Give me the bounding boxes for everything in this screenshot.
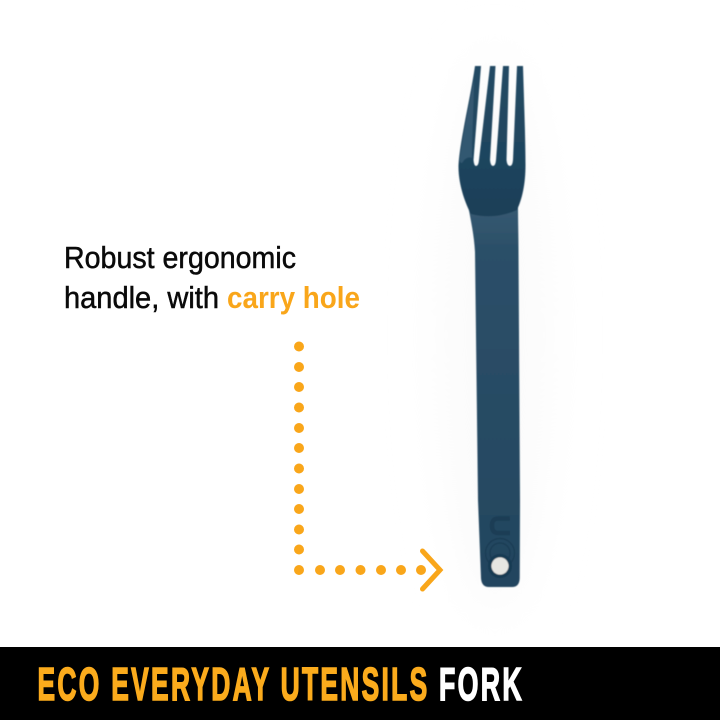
arrow head [422,551,440,589]
dotted arrow [294,342,440,589]
banner title: ECO EVERYDAY UTENSILS [38,658,430,710]
fork illustration [458,66,526,587]
fork head and tines [458,66,526,216]
bottom banner [0,647,720,720]
headline text: Robust ergonomic [64,240,296,275]
embossed rings [486,538,514,568]
head highlight [460,80,474,163]
highlighted words: carry hole [227,280,360,315]
headline text: handle, with [64,280,219,315]
horizontal dots [315,565,426,575]
product name: FORK [439,658,524,710]
carry hole [488,554,512,578]
embossed logo [492,518,510,533]
vertical dots [294,342,304,575]
fork handle [468,205,520,587]
headline text [64,240,360,315]
